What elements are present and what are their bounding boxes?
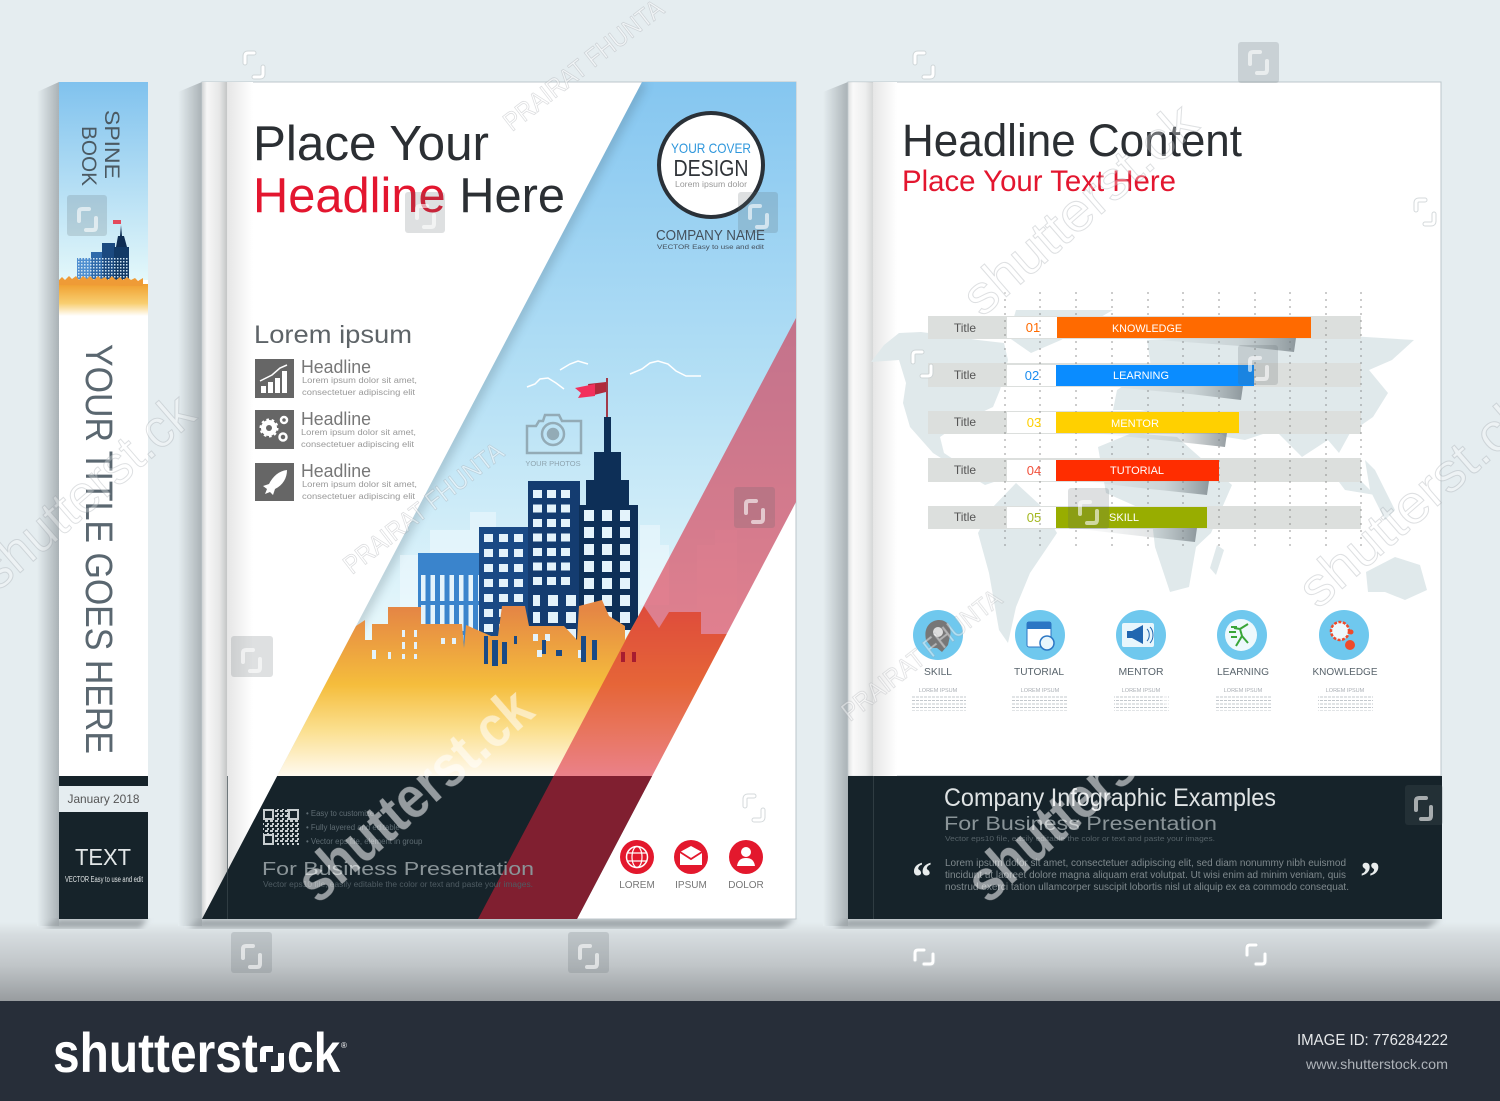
cover badge: Lorem ipsum dolor: [675, 179, 747, 189]
back dark footer: [848, 776, 1442, 919]
spine footer text: [65, 844, 144, 884]
icon row: [911, 610, 1378, 711]
feature item one: [255, 356, 417, 398]
watermark text: PRAIRAT FHUNTA: [835, 583, 1008, 727]
item: skill: [911, 610, 966, 711]
back subheadline: Place Your Text Here: [902, 165, 1176, 198]
feature item three: consectetuer adipiscing elit: [302, 492, 416, 501]
icon: camera placeholder: [527, 415, 581, 453]
cover bullet list: [306, 809, 423, 846]
item: mentor: LOREM IPSUM: [1122, 688, 1161, 694]
footer small line: Vector eps10 file, easily editable the color or text and paste your images.: [945, 834, 1215, 843]
cover headline: [253, 117, 565, 223]
faded background buildings: [400, 512, 669, 604]
icon: mail: [674, 840, 708, 891]
cover headline: Place Your: [253, 117, 489, 171]
panel: front cover: [178, 82, 800, 928]
floor gradient: [0, 922, 1500, 1001]
watermark text: shutterst.ck: [954, 675, 1216, 915]
item: knowledge: LOREM IPSUM: [1326, 688, 1365, 694]
icon: person: DOLOR: [728, 880, 764, 891]
item: knowledge: [1312, 610, 1378, 711]
watermark text: shutterst.ck: [284, 675, 546, 915]
feature item one: consectetuer adipiscing elit: [302, 388, 416, 397]
bar: skill: SKILL: [1109, 512, 1139, 524]
feature item three: [255, 460, 417, 501]
feature item two: Lorem ipsum dolor sit amet,: [301, 428, 416, 437]
bar: tutorial: Title: [954, 463, 976, 477]
spine title text: BOOK: [77, 126, 100, 186]
item: skill: SKILL: [924, 666, 952, 678]
timeline chart: [928, 292, 1361, 548]
flag and pole: [575, 378, 608, 418]
bar: learning: Title: [954, 368, 976, 382]
bar: skill: [954, 507, 1207, 528]
bar: learning: 02: [1025, 368, 1039, 383]
company name: [656, 227, 765, 251]
bar shadows: [1070, 338, 1296, 542]
feature list: [255, 356, 417, 501]
feature item three: Lorem ipsum dolor sit amet,: [302, 480, 417, 489]
cover bullet list: • Easy to customize: [306, 809, 374, 818]
quote body: [945, 858, 1349, 893]
item: knowledge: KNOWLEDGE: [1312, 666, 1378, 678]
feature item two: [255, 408, 416, 449]
watermark small logos: [245, 53, 1434, 964]
company name: COMPANY NAME: [656, 227, 765, 244]
footer heading: Company Infographic Examples: [944, 784, 1276, 812]
section heading: Lorem ipsum: [254, 321, 412, 349]
back headline: Headline Content: [902, 115, 1242, 166]
watermark text: PRAIRAT FHUNTA: [337, 436, 510, 580]
shutterstock logo: shutterstock: [53, 1023, 341, 1085]
bar: knowledge: Title: [954, 321, 976, 335]
date label: January 2018: [68, 792, 140, 806]
bar: skill: Title: [954, 510, 976, 524]
cover headline: Headline Here: [253, 169, 565, 223]
spine title text: [77, 110, 123, 186]
bar: tutorial: 04: [1027, 463, 1041, 478]
footer bar: [0, 1001, 1500, 1101]
feature item three: Headline: [301, 460, 371, 481]
item: mentor: MENTOR: [1118, 666, 1164, 678]
translucent red band: [478, 318, 796, 919]
feature item two: Headline: [301, 408, 371, 429]
image id: IMAGE ID: 776284222: [1297, 1032, 1448, 1049]
photo caption: YOUR PHOTOS: [525, 459, 581, 468]
feature item one: Lorem ipsum dolor sit amet,: [302, 376, 417, 385]
item: learning: LOREM IPSUM: [1224, 688, 1263, 694]
closing quote: ”: [1358, 855, 1379, 901]
cover bullet list: • Vector eps file, element in group: [306, 837, 423, 846]
icon: globe: [619, 840, 655, 891]
company name: VECTOR Easy to use and edit: [657, 245, 764, 251]
panel: back cover: [823, 82, 1442, 928]
feature item one: Headline: [301, 356, 371, 377]
building skyline: [418, 417, 638, 663]
footer subheading: For Business Presentation: [944, 814, 1217, 835]
bar: knowledge: [954, 317, 1311, 338]
bar: learning: [954, 365, 1254, 386]
website: www.shutterstock.com: [1305, 1056, 1448, 1072]
cover badge: YOUR COVER: [671, 140, 751, 156]
panel: spine of book: [37, 82, 148, 928]
spine mini skyline: [59, 220, 143, 286]
cover bullet list: • Fully layered and editable: [306, 823, 400, 832]
bar: learning: LEARNING: [1113, 370, 1169, 382]
watermark tiles: [67, 42, 1443, 973]
item: tutorial: LOREM IPSUM: [1021, 688, 1060, 694]
item: learning: [1216, 610, 1271, 711]
quote body: nostrud exerci tation ullamcorper suscipit lobortis nisl ut aliquip ex ea commodo consequat.: [945, 882, 1349, 893]
cover badge: [659, 113, 763, 217]
orange foreground skyline: [278, 600, 727, 776]
cover badge: DESIGN: [674, 155, 748, 181]
bar: tutorial: TUTORIAL: [1110, 465, 1164, 477]
item: mentor: [1114, 610, 1169, 711]
quote body: Lorem ipsum dolor sit amet, consectetuer adipiscing elit, sed diam nonummy nibh euismod: [945, 858, 1346, 869]
bar: tutorial: [954, 460, 1219, 481]
cover image area: [202, 82, 800, 919]
item: tutorial: TUTORIAL: [1014, 666, 1064, 678]
opening quote: “: [910, 855, 931, 901]
bar: mentor: Title: [954, 415, 976, 429]
spine footer text: VECTOR Easy to use and edit: [65, 875, 144, 884]
bar: knowledge: KNOWLEDGE: [1112, 323, 1182, 335]
watermark text: shutterst.ck: [951, 91, 1210, 327]
bar: mentor: [954, 412, 1239, 433]
cover subtitle: Vector eps10 file, easily editable the color or text and paste your images.: [263, 880, 533, 889]
icon: person: [728, 840, 764, 891]
icon: mail: IPSUM: [675, 880, 707, 891]
bar: mentor: 03: [1027, 415, 1041, 430]
item: learning: LEARNING: [1217, 666, 1269, 678]
item: tutorial: [1012, 610, 1067, 711]
icon: globe: LOREM: [619, 880, 655, 891]
bar: knowledge: 01: [1026, 320, 1040, 335]
quote body: tincidunt ut laoreet dolore magna aliquam erat volutpat. Ut wisi enim ad minim veniam, quis: [945, 870, 1346, 881]
clouds: [527, 361, 701, 389]
spine footer text: TEXT: [75, 844, 131, 870]
registered mark: ®: [341, 1041, 347, 1050]
cover subtitle: [262, 858, 534, 889]
world map: [871, 310, 1427, 643]
cover subtitle: For Business Presentation: [262, 858, 534, 879]
icon: QR code: [263, 809, 299, 845]
item: skill: LOREM IPSUM: [919, 688, 958, 694]
bar: skill: 05: [1027, 510, 1041, 525]
spine main title: YOUR TITLE GOES HERE: [77, 344, 119, 754]
spine title text: SPINE: [100, 110, 123, 179]
contact icons: [619, 840, 764, 891]
bar: mentor: MENTOR: [1111, 418, 1159, 430]
dark footer of cover: [202, 776, 652, 919]
feature item two: consectetuer adipiscing elit: [301, 440, 415, 449]
